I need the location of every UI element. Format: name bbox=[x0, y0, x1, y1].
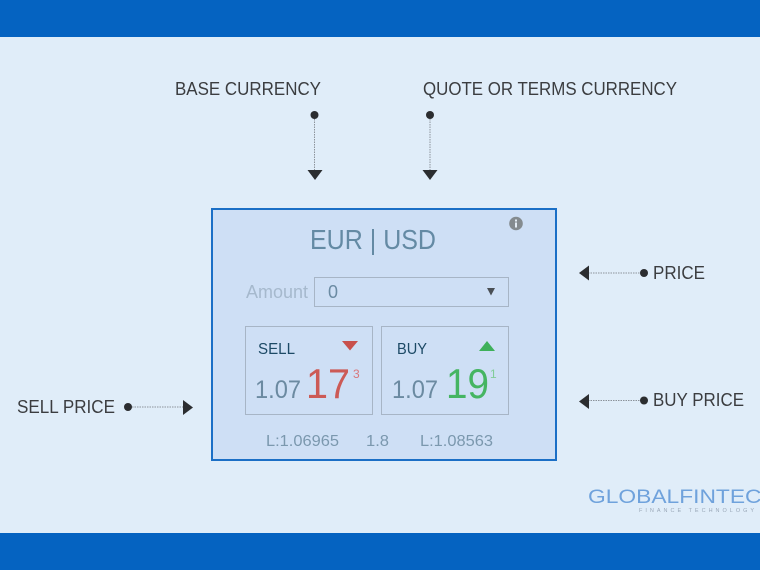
sell label: SELL bbox=[258, 341, 295, 358]
arrow: price bbox=[579, 266, 648, 280]
label: price: PRICE bbox=[653, 262, 705, 283]
low sell value: L:1.06965 bbox=[266, 433, 339, 450]
logo tagline: FINANCE TECHNOLOGY bbox=[639, 508, 757, 514]
buy up arrow bbox=[479, 341, 495, 351]
logo wordmark: GLOBALFINTECH bbox=[588, 486, 760, 508]
label: buy price: BUY PRICE bbox=[653, 389, 744, 410]
panel: trading widget bbox=[212, 209, 556, 460]
sell down arrow bbox=[342, 341, 358, 350]
arrow: quote currency bbox=[422, 111, 438, 180]
pair heading: EUR | USD bbox=[310, 224, 436, 255]
sell box bbox=[246, 326, 372, 414]
spread value: 1.8 bbox=[366, 433, 389, 450]
arrow: buy price bbox=[579, 394, 648, 409]
sell big pips: 17 bbox=[306, 360, 350, 407]
logo bbox=[588, 486, 760, 514]
label: quote or terms currency: QUOTE OR TERMS CURRENCY bbox=[423, 78, 677, 99]
bottom band bbox=[0, 533, 760, 570]
buy big pips: 19 bbox=[446, 360, 489, 407]
amount dropdown bbox=[314, 278, 508, 306]
buy fractional pip: 1 bbox=[490, 367, 497, 381]
buy label: BUY bbox=[397, 341, 427, 358]
buy box bbox=[382, 326, 508, 414]
sell fractional pip: 3 bbox=[353, 367, 360, 381]
amount dropdown: 0 bbox=[328, 282, 338, 302]
amount label: Amount bbox=[246, 282, 308, 302]
icon: info bbox=[509, 217, 523, 230]
label: base currency: BASE CURRENCY bbox=[175, 78, 321, 99]
sell price prefix: 1.07 bbox=[255, 376, 301, 404]
top band bbox=[0, 0, 760, 37]
label: sell price: SELL PRICE bbox=[17, 396, 115, 417]
buy price prefix: 1.07 bbox=[392, 376, 438, 404]
arrow: sell price bbox=[124, 400, 193, 415]
low buy value: L:1.08563 bbox=[420, 433, 493, 450]
arrow: base currency bbox=[308, 111, 322, 180]
